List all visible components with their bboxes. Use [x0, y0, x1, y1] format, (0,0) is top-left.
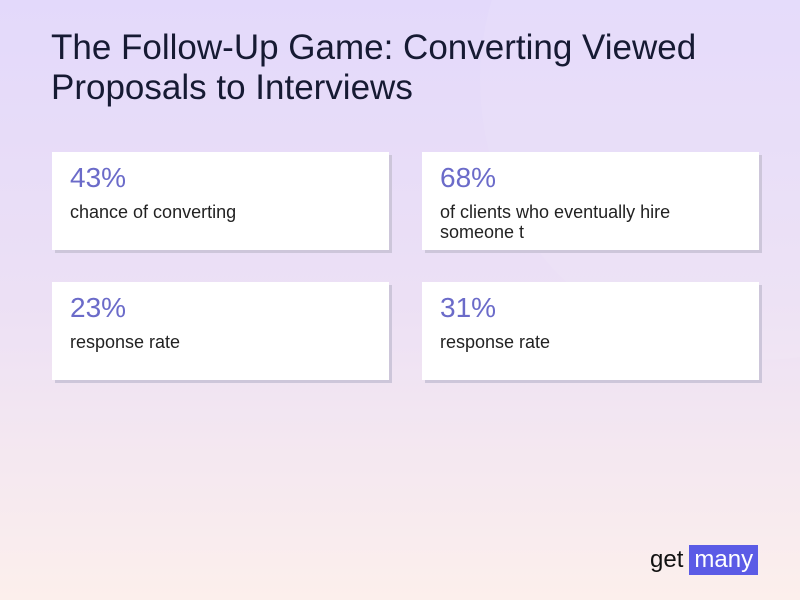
card: 31%: response rate [440, 332, 550, 352]
logo: get [650, 546, 683, 573]
logo [650, 545, 758, 575]
card: 43%: 43% [70, 162, 126, 193]
card: 23%: 23% [70, 292, 126, 323]
card: 23% [52, 282, 389, 380]
card: 68%: of clients who eventually hire [440, 202, 670, 222]
title [51, 28, 696, 107]
title: The Follow-Up Game: Converting Viewed [51, 28, 696, 67]
card: 68%: someone t [440, 222, 524, 242]
title: Proposals to Interviews [51, 68, 413, 107]
card: 23%: response rate [70, 332, 180, 352]
card: 68%: 68% [440, 162, 496, 193]
card: 43% [52, 152, 389, 250]
card: 68% [422, 152, 759, 250]
logo: many [694, 546, 753, 573]
card: 43%: chance of converting [70, 202, 236, 222]
card: 31% [422, 282, 759, 380]
card: 31%: 31% [440, 292, 496, 323]
